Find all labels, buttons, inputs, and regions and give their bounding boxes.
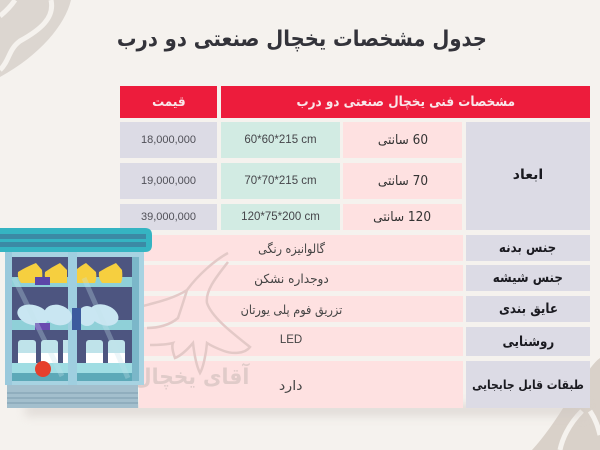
- price 70: [120, 163, 217, 199]
- value: body material: [139, 235, 463, 261]
- shelves: [12, 277, 132, 381]
- label: movable shelves: [466, 361, 590, 408]
- dimensions 70: [221, 163, 340, 199]
- price 70: 19,000,000: [141, 175, 196, 187]
- label: lighting: روشنایی: [502, 334, 554, 350]
- value: lighting: [139, 327, 463, 356]
- fridge body: [5, 252, 144, 385]
- label: insulation: [466, 296, 590, 322]
- value: insulation: [139, 296, 463, 322]
- header: specifications: مشخصات فنی یخچال صنعتی دو درب: [296, 94, 515, 110]
- price 120: [120, 204, 217, 230]
- size 60: 60 سانتی: [377, 132, 428, 148]
- label: dimensions: [466, 122, 590, 230]
- label: body material: جنس بدنه: [499, 240, 557, 256]
- label: insulation: عایق بندی: [499, 301, 557, 317]
- value: glass material: [139, 265, 463, 291]
- size 120: 120 سانتی: [374, 210, 431, 224]
- title: جدول مشخصات یخچال صنعتی دو درب: [117, 26, 487, 52]
- value: body material: گالوانیزه رنگی: [258, 240, 324, 256]
- size 120: [343, 204, 462, 230]
- watermark: brand text: آقای یخچال: [134, 364, 249, 390]
- glass glare: [14, 278, 128, 378]
- red ball: [35, 361, 51, 377]
- header: specifications: [221, 86, 590, 118]
- top canopy: [0, 228, 152, 252]
- size 70: 70 سانتی: [377, 174, 428, 188]
- price 60: [120, 122, 217, 158]
- header: price: [120, 86, 217, 118]
- shadow under table: [25, 404, 585, 416]
- label: glass material: [466, 265, 590, 291]
- decoration: top-left leaf: [0, 0, 71, 77]
- milk row: [18, 340, 125, 363]
- value: glass material: دوجداره نشکن: [254, 270, 328, 286]
- value: insulation: تزریق فوم پلی یورتان: [240, 302, 342, 316]
- decoration: bottom-right leaf: [532, 358, 600, 450]
- label: movable shelves: طبقات قابل جابجایی: [472, 377, 584, 392]
- dimensions 70: 70*70*215 cm: [244, 175, 317, 187]
- price 120: 39,000,000: [141, 211, 196, 223]
- label: dimensions: ابعاد: [513, 167, 543, 183]
- price 60: 18,000,000: [141, 134, 196, 146]
- dimensions 60: 60*60*215 cm: [244, 134, 317, 146]
- label: body material: [466, 235, 590, 261]
- icon: display fridge: [0, 228, 152, 408]
- value: movable shelves: [139, 361, 463, 408]
- cheese row: [18, 263, 122, 285]
- fish row: [15, 300, 122, 330]
- label: glass material: جنس شیشه: [493, 270, 563, 286]
- dimensions 120: [221, 204, 340, 230]
- size 60: [343, 122, 462, 158]
- dimensions 120: 120*75*200 cm: [241, 211, 320, 223]
- size 70: [343, 163, 462, 199]
- value: lighting: LED: [280, 334, 302, 346]
- label: lighting: [466, 327, 590, 356]
- header: price: قیمت: [152, 94, 185, 110]
- fridge base: [7, 385, 138, 408]
- dimensions 60: [221, 122, 340, 158]
- value: movable shelves: دارد: [279, 378, 303, 394]
